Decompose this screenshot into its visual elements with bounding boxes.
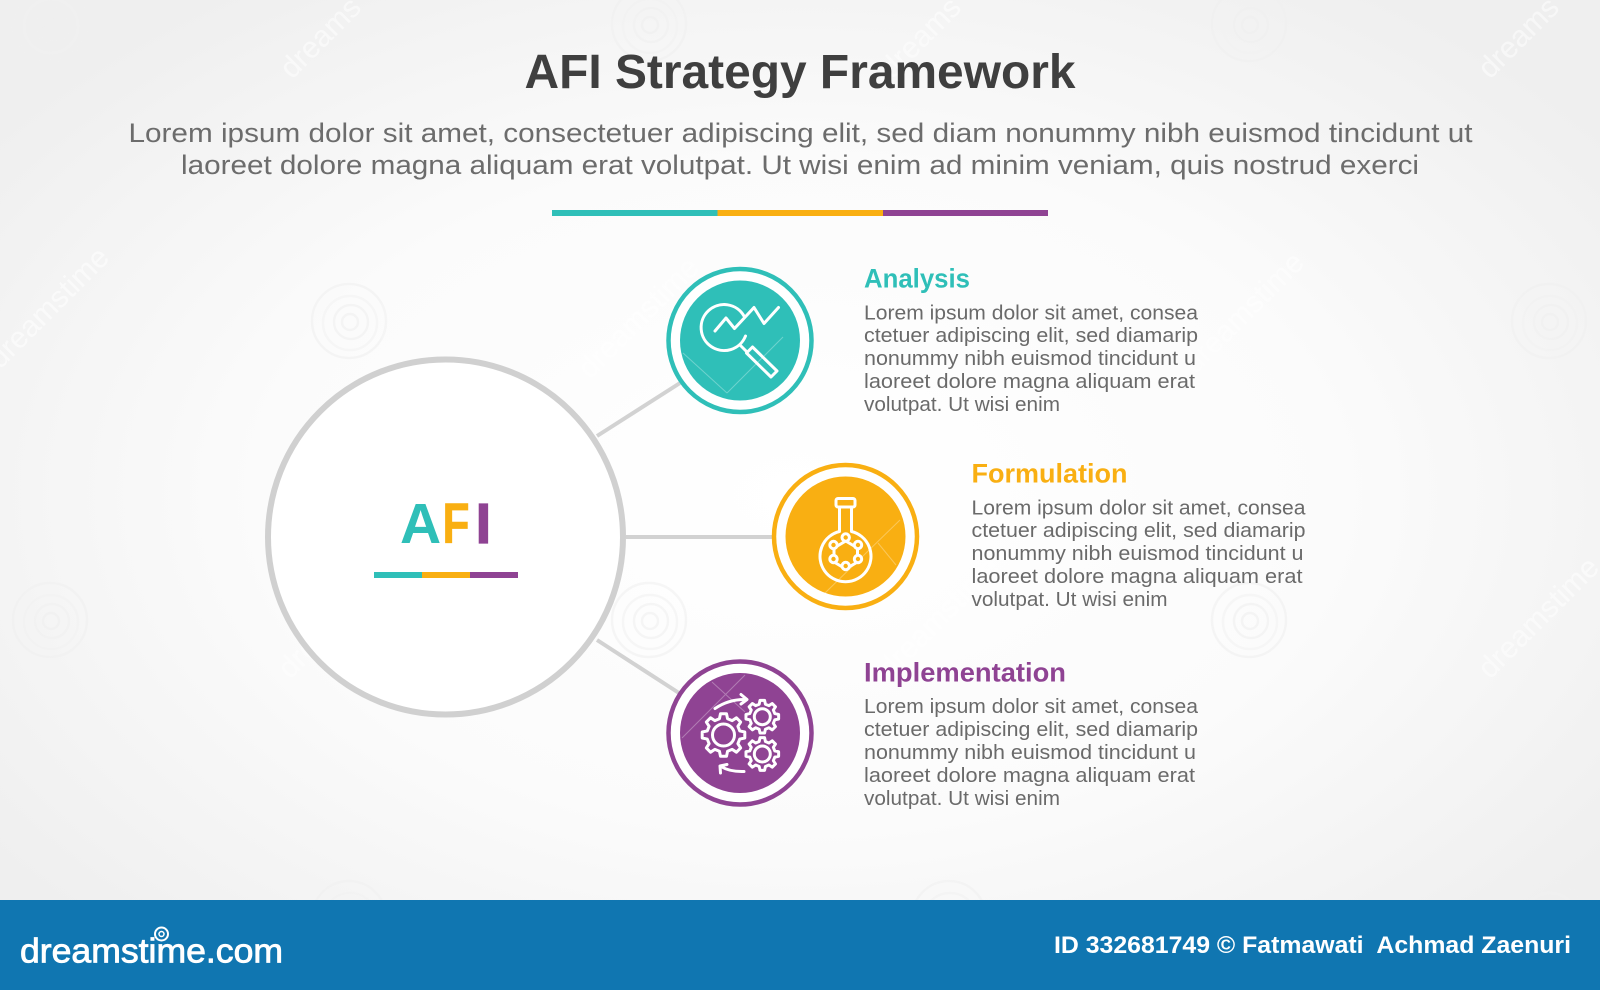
text block: Analysis: Lorem ipsum dolor sit amet, consea (864, 302, 1199, 324)
heading: Implementation: Implementation (864, 658, 1066, 688)
text block: Formulation: ctetuer adipiscing elit, sed diamarip (972, 520, 1306, 542)
text block: Formulation (972, 498, 1306, 611)
icon: analysis magnifier and chart (668, 269, 812, 412)
text block: Implementation: ctetuer adipiscing elit, sed diamarip (864, 719, 1198, 741)
subtitle text block (128, 118, 1473, 180)
subtitle text block: Lorem ipsum dolor sit amet, consectetuer adipiscing elit, sed diam nonummy nibh euismod tincidunt ut (128, 118, 1473, 148)
text block: Analysis: laoreet dolore magna aliquam erat (864, 371, 1195, 393)
footer credit: ID 332681749 © Fatmawati Achmad Zaenuri (1054, 932, 1571, 959)
text block: Formulation: laoreet dolore magna aliquam erat (972, 566, 1303, 588)
icon: formulation flask (774, 465, 917, 608)
heading: Analysis: Analysis (864, 264, 970, 294)
footer logo: dreamstime.com: dreamstime.com (20, 932, 283, 970)
text: dreamstime (1177, 246, 1311, 380)
text block: Analysis: ctetuer adipiscing elit, sed diamarip (864, 325, 1198, 347)
text block: Analysis: nonummy nibh euismod tincidunt u (864, 348, 1196, 370)
text block: Analysis: volutpat. Ut wisi enim (864, 394, 1060, 416)
text block: Implementation: nonummy nibh euismod tincidunt u (864, 742, 1196, 764)
icon: implementation gears (668, 662, 812, 804)
text block: Formulation: nonummy nibh euismod tincidunt u (972, 543, 1304, 565)
AFI label: I (476, 492, 491, 556)
text block: Implementation: laoreet dolore magna aliquam erat (864, 765, 1195, 787)
AFI label: A (400, 492, 441, 556)
connector lines (597, 383, 773, 693)
central circle: AFI (268, 360, 623, 714)
tricolor divider (552, 210, 1048, 216)
AFI label: F (442, 492, 470, 556)
text: dreamstime (572, 251, 706, 385)
text: dreamstime (272, 551, 406, 685)
heading: Formulation: Formulation (972, 458, 1128, 488)
AFI label (400, 492, 491, 556)
text block: Formulation: volutpat. Ut wisi enim (972, 589, 1168, 611)
text block: Implementation: Lorem ipsum dolor sit amet, consea (864, 696, 1199, 718)
title: AFI Strategy Framework (524, 46, 1076, 99)
text block: Formulation: Lorem ipsum dolor sit amet, consea (972, 498, 1306, 520)
text block: Analysis (864, 302, 1199, 416)
footer bar (0, 900, 1600, 990)
text: dreamstime (872, 551, 1006, 685)
text block: Implementation: volutpat. Ut wisi enim (864, 788, 1060, 810)
AFI tricolor underline (374, 572, 518, 578)
subtitle text block: laoreet dolore magna aliquam erat volutpat. Ut wisi enim ad minim veniam, quis nostrud exerci (181, 150, 1419, 180)
text block: Implementation (864, 696, 1199, 810)
